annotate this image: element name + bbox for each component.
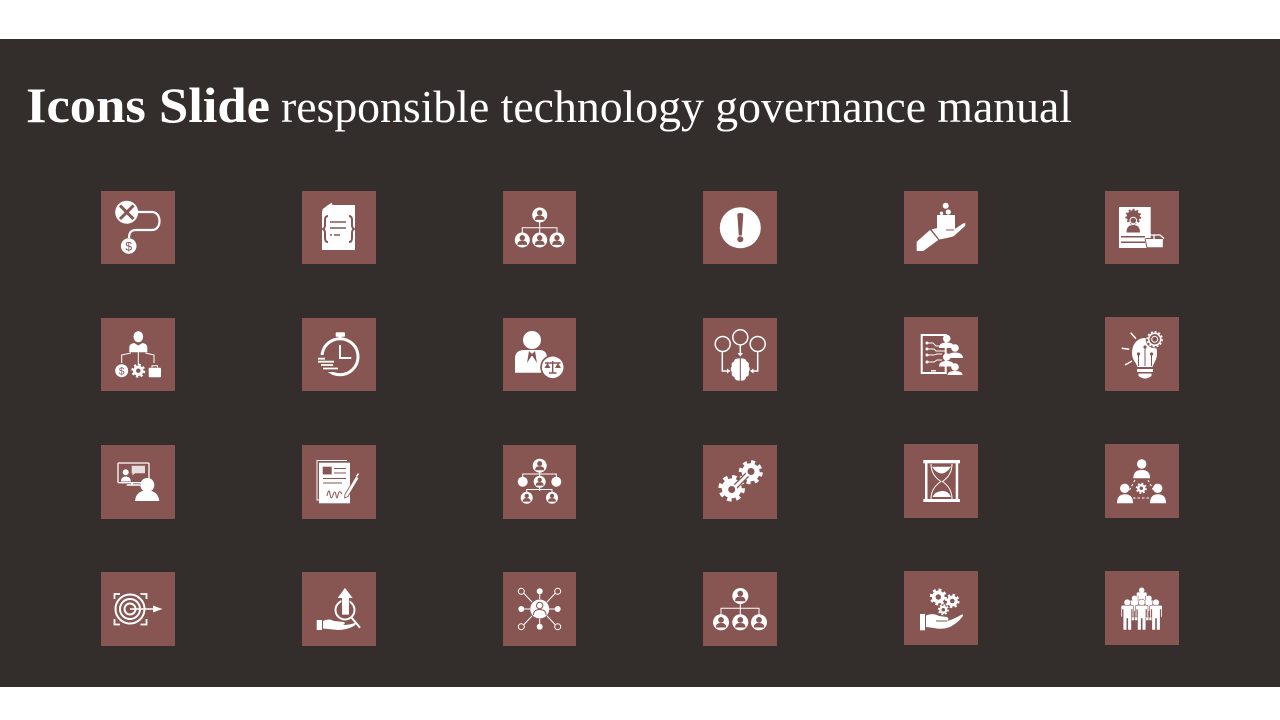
icon: organisation chart — [503, 445, 576, 519]
icon: brain with three inputs — [703, 318, 777, 391]
icon: tools to dollar path — [101, 191, 175, 264]
icon: signed contract — [302, 445, 376, 519]
icon: code document — [302, 191, 376, 264]
icon: hand with arrow and magnifier — [302, 572, 376, 646]
icon: hourglass — [904, 444, 978, 518]
title: Icons Slide — [26, 77, 270, 133]
icon: stopwatch — [302, 318, 376, 391]
icon: gears with wrench — [703, 445, 777, 519]
icon: manager with money, gear and briefcase: $ — [119, 366, 125, 378]
icon: video conference user — [101, 445, 175, 519]
icon: tools to dollar path: $ — [125, 240, 132, 254]
icon: exclamation alert — [703, 191, 777, 264]
icon: hand holding wallet — [904, 191, 978, 264]
icon: reporting hierarchy — [703, 572, 777, 646]
icon: manager with money, gear and briefcase — [101, 318, 175, 391]
icon: lightbulb with gear — [1105, 317, 1179, 391]
icon: team hierarchy — [503, 191, 576, 264]
icon: team triangle with gear — [1105, 444, 1179, 518]
icon: hand holding gears — [904, 571, 978, 645]
icon: legal person with scales — [503, 318, 576, 391]
title: responsible technology governance manual — [281, 81, 1072, 132]
icon: tablet network with people — [904, 317, 978, 391]
icon: group of people — [1105, 571, 1179, 645]
icon: central person network — [503, 572, 576, 646]
icon: profile document with box — [1105, 191, 1179, 264]
icon: target with arrow — [101, 572, 175, 646]
